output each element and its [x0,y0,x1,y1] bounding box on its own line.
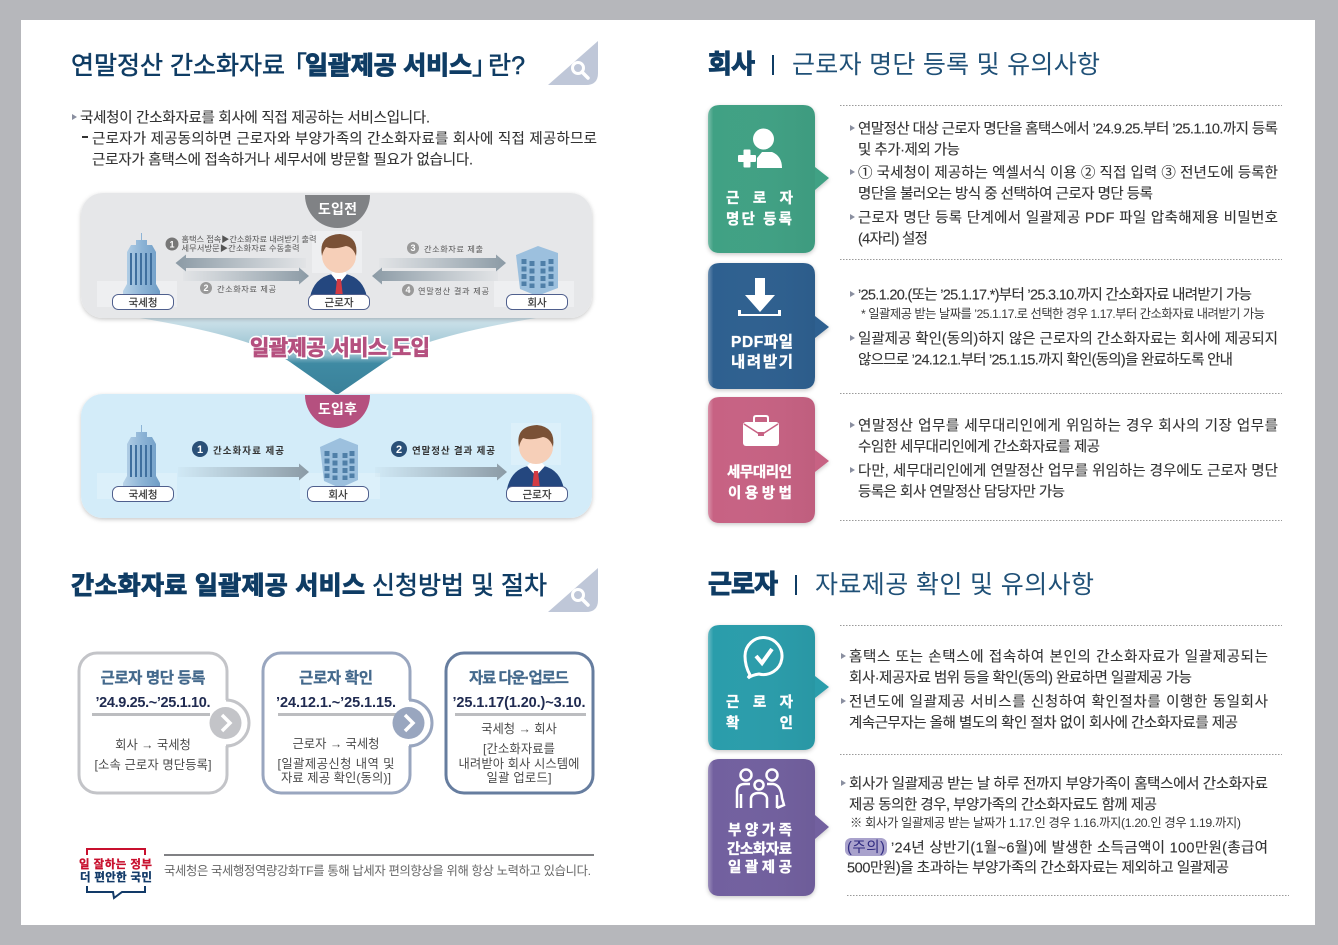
badge: tax agent [708,397,829,523]
step 3 label: 3 [410,243,416,253]
badge: worker confirmation: 근 로 자 [726,694,794,711]
step 4 label [402,284,489,296]
text block: tax agent: 다만, 세무대리인에게 연말정산 업무를 위임하는 경우에도 근로자 명단 [858,463,1278,480]
badge: tax agent: 세무대리인 [727,464,792,481]
label: tax office: 국세청 [129,297,157,309]
label: company: 회사 [328,489,348,501]
icon: tax office tower [97,425,177,499]
icon: family [737,770,784,808]
headline: service introduced: 일괄제공 서비스 도입 [250,337,430,360]
text block: tax agent: 연말정산 업무를 세무대리인에게 위임하는 경우 회사의 기장 업무를 [858,418,1278,435]
badge: dependents: 간소화자료 [727,841,792,858]
text block: tax agent: 등록은 회사 연말정산 담당자만 가능 [858,484,1065,501]
text block: dependents: 회사가 일괄제공 받는 날 하루 전까지 부양가족이 홈택스에서 간소화자료 [849,776,1268,793]
text block: register workers: 근로자 명단 등록 단계에서 일괄제공 PDF 파일 압축해제용 비밀번호 [858,210,1278,227]
step card: worker confirmation: 자료 제공 확인(동의)] [281,771,391,785]
label: company [506,294,568,310]
text block: dependents: 500만원)을 초과하는 부양가족의 간소화자료는 제외하고 일괄제공 [847,860,1229,877]
badge: download PDF: PDF파일 [731,333,793,351]
label: worker: 근로자 [325,297,354,309]
heading: application and procedure [71,568,598,612]
text block: download PDF: 일괄제공 확인(동의)하지 않은 근로자의 간소화자료는 회사에 제공되지 [858,331,1278,348]
step 1 label [192,441,284,457]
text block: worker confirmation: 회사·제공자료 범위 등을 확인(동의) 완료하면 일괄제공 가능 [849,670,1192,687]
logo: government slogan [79,849,152,898]
badge: download PDF: 내려받기 [731,353,793,371]
heading: what is the service: 일괄제공 서비스 [305,52,472,80]
icon: add person [738,128,782,168]
step 1 label: 세무서방문▶간소화자료 수동출력 [182,243,300,253]
icon: download [738,278,781,316]
arrow: employee to tax office [176,254,306,272]
label: tax office [112,294,174,310]
step 1 label: 홈택스 접속▶간소화자료 내려받기 출력 [182,234,316,244]
heading: worker [708,569,1094,599]
text block: worker confirmation [841,649,1268,732]
step 1 label: 1 [169,240,175,250]
heading: what is the service: 」 [472,52,497,80]
badge: dependents: 일 괄 제 공 [728,859,792,876]
text block: dependents: 제공 동의한 경우, 부양가족의 간소화자료도 함께 제공 [849,797,1157,814]
step card: register workers: ’24.9.25.~’25.1.10. [96,695,210,711]
arrow: tax office to employee [183,268,309,284]
icon: worker [310,231,367,297]
icon: chat check [745,638,782,678]
text block: worker confirmation: 홈택스 또는 손택스에 접속하여 본인의 간소화자료가 일괄제공되는 [849,649,1268,666]
step card: register workers: [소속 근로자 명단등록] [94,758,212,772]
badge: register workers [708,105,829,253]
heading: company: 근로자 명단 등록 및 유의사항 [792,51,1100,79]
text block: tax agent: 수임한 세무대리인에게 간소화자료를 제공 [858,439,1100,456]
text block: register workers [850,121,1278,248]
heading: worker: 자료제공 확인 및 유의사항 [815,571,1094,599]
step card: worker confirmation: 근로자 확인 [299,669,373,687]
step 4 label: 연말정산 결과 제공 [418,286,489,296]
badge: register workers: 명단 등록 [726,211,792,228]
heading: what is the service: 연말정산 간소화자료 [71,52,285,80]
step card: worker confirmation: 근로자 → 국세청 [292,737,380,751]
text block: register workers: 명단을 불러오는 방식 중 선택하여 근로자 명단 등록 [858,186,1153,203]
step card: download and upload [446,653,593,793]
label: company [308,486,368,502]
arrow: employee to company [379,254,506,272]
badge: after: 도입후 [318,401,357,417]
badge: dependents [708,759,829,896]
arrow: tax office to company [178,464,309,480]
text block: dependents: ’24년 상반기(1월~6월)에 발생한 소득금액이 100만원(총급여 [891,840,1268,857]
step 4 label: 4 [405,285,411,295]
label: company: 회사 [527,297,547,309]
logo: government slogan: 일 잘하는 정부 [79,857,152,871]
step card: download and upload: 내려받아 회사 시스템에 [458,757,580,771]
step card: worker confirmation: ’24.12.1.~’25.1.15. [276,695,396,711]
heading: what is the service [71,41,598,85]
text block: register workers: (4자리) 설정 [858,231,928,248]
step 2 label: 2 [203,283,209,293]
badge: register workers: 근 로 자 [726,190,794,207]
text block: register workers: 연말정산 대상 근로자 명단을 홈택스에서 ’24.9.25.부터 ’25.1.10.까지 등록 [858,121,1278,138]
arrow: company to employee [372,268,498,284]
text block: dependents [841,776,1268,877]
badge: worker confirmation: 확 인 [726,715,793,732]
funnel arrow between panels [127,316,549,395]
text block: download PDF: ’25.1.20.(또는 ’25.1.17.*)부터 ’25.3.10.까지 간소화자료 내려받기 가능 [858,287,1252,304]
label: tax office [112,486,174,502]
label: worker: 근로자 [523,489,552,501]
label: worker [506,486,568,502]
heading: application and procedure: 간소화자료 일괄제공 서비스 [71,572,365,600]
text block: service introduction: 근로자가 제공동의하면 근로자와 부양가족의 간소화자료를 회사에 직접 제공하므로 [92,131,597,148]
step 1 label: 간소화자료 제공 [213,445,284,457]
icon: company building [494,246,574,307]
step card: download and upload: 자료 다운·업로드 [469,669,569,687]
text block: service introduction [72,110,597,169]
text block: service introduction: 국세청이 간소화자료를 회사에 직접 제공하는 서비스입니다. [80,110,430,127]
text block: service introduction: 근로자가 홈택스에 접속하거나 세무서에 방문할 필요가 없습니다. [92,152,473,169]
headline: service introduced: 일괄제공 서비스 도입 [250,337,430,360]
text block: download PDF: * 일괄제공 받는 날짜를 ’25.1.17.로 선택한 경우 1.17.부터 간소화자료 내려받기 가능 [861,307,1265,321]
icon: worker [507,423,564,489]
icon: company building [300,438,380,499]
icon: briefcase [743,416,779,446]
step 1 label [166,234,316,253]
arrow: company to worker [375,464,507,480]
text block: tax agent [850,418,1278,501]
step 2 label [391,441,495,457]
caution tag: (주의) [847,839,885,856]
step card: worker confirmation [263,653,432,793]
logo: government slogan: 더 편안한 국민 [80,870,152,884]
text block: download PDF [850,287,1278,369]
step 3 label [407,242,483,254]
step card: download and upload: [간소화자료를 [483,742,555,756]
label: tax office: 국세청 [129,489,157,501]
panel: after introduction [81,394,592,518]
step card: register workers: 회사 → 국세청 [115,738,191,752]
text block: register workers: ① 국세청이 제공하는 엑셀서식 이용 ② 직접 입력 ③ 전년도에 등록한 [858,165,1278,182]
text block: dependents: ※ 회사가 일괄제공 받는 날짜가 1.17.인 경우 1.16.까지(1.20.인 경우 1.19.까지) [850,816,1241,830]
icon: tax office tower [97,233,177,307]
text block: download PDF: 않으므로 ’24.12.1.부터 ’25.1.15.까지 확인(동의)을 완료하도록 안내 [858,352,1233,369]
text block: register workers: 및 추가·제외 가능 [858,142,960,159]
footer statement: 국세청은 국세행정역량강화TF를 통해 납세자 편의향상을 위해 항상 노력하고 있습니다. [164,863,591,878]
heading: what is the service: 란? [488,52,525,80]
badge: after [305,395,370,428]
heading: worker: 근로자 [708,569,778,599]
badge: download PDF [708,263,829,389]
step 1 label: 1 [197,444,203,456]
badge: worker confirmation [708,625,829,750]
step 2 label: 간소화자료 제공 [217,284,276,294]
step card: worker confirmation: [일괄제공신청 내역 및 [278,757,394,771]
label: worker [308,294,370,310]
step card: register workers [79,653,249,793]
step 2 label: 연말정산 결과 제공 [412,445,495,457]
step 3 label: 간소화자료 제출 [424,244,483,254]
text block: worker confirmation: 계속근무자는 올해 별도의 확인 절차 없이 회사에 간소화자료를 제공 [849,715,1238,732]
step 2 label: 2 [396,444,402,456]
step card: download and upload: 일괄 업로드] [486,771,552,785]
badge: before: 도입전 [318,201,357,217]
badge: before [305,195,370,228]
step card: register workers: 근로자 명단 등록 [100,669,206,687]
heading: what is the service: 「 [282,52,307,80]
heading: application and procedure: 신청방법 및 절차 [372,572,547,600]
step 2 label [200,282,276,294]
step card: download and upload: ’25.1.17(1.20.)~3.10. [452,695,586,711]
badge: tax agent: 이 용 방 법 [728,485,792,502]
badge: dependents: 부 양 가 족 [728,822,792,839]
step card: download and upload: 국세청 → 회사 [481,722,557,736]
text block: worker confirmation: 전년도에 일괄제공 서비스를 신청하여 확인절차를 이행한 동일회사 [849,694,1268,711]
heading: company: 회사 [708,49,755,79]
panel: before introduction [81,193,592,318]
